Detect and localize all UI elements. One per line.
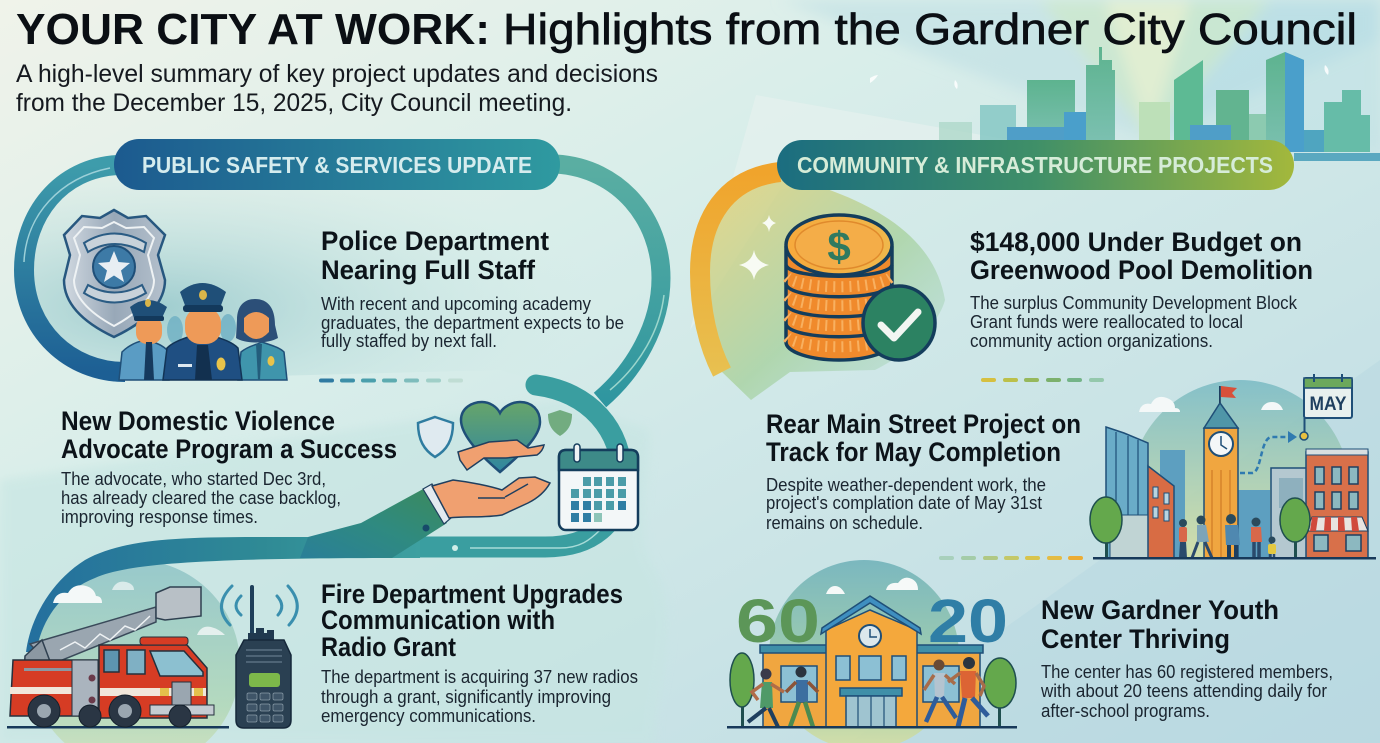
icon: coin stack bbox=[786, 215, 892, 360]
heading: fire department bbox=[321, 579, 623, 662]
tree: left bbox=[730, 653, 754, 727]
icon: calendar bbox=[559, 444, 638, 530]
wings bbox=[763, 652, 980, 727]
tree: right bbox=[984, 658, 1016, 727]
ground bbox=[727, 726, 1017, 728]
text: budget: Grant funds were reallocated to local bbox=[970, 311, 1243, 332]
text: budget: The surplus Community Development Block bbox=[970, 292, 1298, 313]
heading: domestic violence: New Domestic Violence bbox=[61, 406, 335, 436]
background circle bbox=[1130, 380, 1350, 558]
text: budget bbox=[970, 292, 1298, 351]
back buildings bbox=[1160, 450, 1185, 558]
icon: radio bbox=[221, 585, 297, 728]
panel: community and infrastructure bbox=[700, 140, 1376, 743]
text: youth center: after-school programs. bbox=[1041, 700, 1210, 721]
subtitle: A high-level summary of key project updates and decisions bbox=[16, 60, 658, 88]
clouds bbox=[53, 582, 225, 635]
shield: right bbox=[548, 410, 572, 436]
upper hand bbox=[458, 440, 544, 470]
number 20: 20 bbox=[928, 587, 1008, 655]
divider dashes: yellow green bbox=[981, 378, 1104, 382]
heading: domestic violence bbox=[61, 406, 397, 464]
text: youth center bbox=[1040, 661, 1333, 721]
clouds bbox=[1139, 397, 1283, 412]
background figures bbox=[167, 314, 236, 344]
officer: right bbox=[236, 299, 287, 380]
dashed arrow bbox=[1240, 431, 1297, 473]
heading: fire department: Communication with bbox=[321, 605, 555, 635]
truck body bbox=[10, 660, 99, 716]
text: domestic violence: The advocate, who started Dec 3rd, bbox=[61, 468, 326, 489]
section heading: community: COMMUNITY & INFRASTRUCTURE PROJECTS bbox=[797, 152, 1273, 178]
people walking bbox=[1179, 514, 1276, 558]
ribbon: lower wave bbox=[26, 385, 622, 652]
shield: left bbox=[418, 417, 453, 457]
heading: budget: $148,000 Under Budget on bbox=[970, 227, 1302, 257]
title: Highlights from the Gardner City Council bbox=[503, 5, 1357, 54]
icon: check badge bbox=[863, 286, 935, 360]
title: YOUR CITY AT WORK: bbox=[16, 5, 490, 54]
divider dashes: green orange bbox=[939, 556, 1083, 560]
clock tower bbox=[1204, 386, 1238, 558]
ground bbox=[7, 726, 229, 728]
text: domestic violence: improving response times. bbox=[61, 506, 258, 527]
heading: police: Police Department bbox=[321, 226, 549, 256]
ground bbox=[1093, 557, 1376, 560]
officer: centre bbox=[163, 283, 242, 380]
heading: budget bbox=[970, 227, 1313, 285]
heading: rear main street: Rear Main Street Project on bbox=[766, 409, 1081, 439]
icon: fire truck scene bbox=[7, 582, 229, 728]
text: police bbox=[321, 293, 624, 351]
icon: police badge bbox=[64, 210, 165, 337]
icon: hands holding heart bbox=[300, 402, 572, 558]
text: youth center: with about 20 teens attending daily for bbox=[1040, 680, 1327, 701]
text: youth center: The center has 60 registered members, bbox=[1041, 661, 1333, 682]
heading: youth center: New Gardner Youth bbox=[1041, 595, 1279, 625]
tree: left bbox=[1090, 497, 1122, 558]
central block bbox=[826, 610, 917, 727]
heading: fire department: Fire Department Upgrades bbox=[321, 579, 623, 609]
text: rear main street: remains on schedule. bbox=[766, 512, 923, 533]
text: rear main street: project's complation date of May 31st bbox=[766, 492, 1042, 513]
brick building bbox=[1306, 449, 1368, 558]
heading: police: Nearing Full Staff bbox=[321, 255, 536, 285]
heart bbox=[461, 402, 540, 472]
heading: youth center bbox=[1041, 595, 1279, 654]
icon: city street scene bbox=[1090, 374, 1376, 560]
text: police: fully staffed by next fall. bbox=[321, 330, 497, 351]
icon: sparkles bbox=[739, 215, 776, 280]
sleeve bbox=[300, 488, 447, 558]
text: rear main street bbox=[766, 474, 1046, 533]
icon: youth center scene bbox=[727, 560, 1017, 743]
ribbon: top loop bbox=[24, 164, 664, 400]
heading: youth center: Center Thriving bbox=[1041, 624, 1230, 654]
text: fire department: The department is acquiring 37 new radios bbox=[321, 666, 638, 687]
skyline bbox=[870, 47, 1380, 161]
ribbon: orange arc bbox=[700, 172, 945, 400]
tree: right bbox=[1280, 498, 1310, 558]
section heading: public safety: PUBLIC SAFETY & SERVICES UPDATE bbox=[142, 152, 532, 178]
divider dashes: blue bbox=[319, 378, 463, 382]
number 60: 60 bbox=[736, 587, 820, 655]
panel: public safety and services bbox=[7, 139, 664, 728]
text: budget: community action organizations. bbox=[970, 330, 1213, 351]
text: police: graduates, the department expects to be bbox=[321, 312, 624, 333]
text: police: With recent and upcoming academy bbox=[321, 293, 592, 314]
clouds bbox=[826, 578, 918, 594]
heading: police bbox=[321, 226, 549, 285]
running people bbox=[748, 657, 988, 727]
heading: fire department: Radio Grant bbox=[321, 632, 456, 662]
subtitle: from the December 15, 2025, City Council meeting. bbox=[16, 89, 572, 117]
orange building bbox=[1148, 466, 1174, 558]
cuff bbox=[423, 484, 451, 524]
heading: domestic violence: Advocate Program a Success bbox=[61, 434, 397, 464]
officer: left bbox=[119, 299, 169, 380]
text: fire department bbox=[321, 666, 638, 726]
radio waves bbox=[221, 586, 297, 625]
text: domestic violence bbox=[61, 468, 341, 527]
text: rear main street: Despite weather-dependent work, the bbox=[766, 474, 1046, 495]
text: fire department: emergency communications. bbox=[321, 705, 536, 726]
title bbox=[16, 5, 1357, 54]
glass building bbox=[1106, 427, 1148, 558]
heading: rear main street: Track for May Completion bbox=[766, 437, 1061, 467]
background circle: fire truck bbox=[30, 560, 240, 743]
section heading: public safety bbox=[114, 139, 560, 190]
heading: budget: Greenwood Pool Demolition bbox=[970, 255, 1313, 285]
wheels bbox=[28, 695, 191, 727]
subtitle bbox=[16, 60, 658, 117]
calendar: May: MAY bbox=[1310, 394, 1347, 415]
icon: police officers bbox=[119, 283, 287, 380]
grey building bbox=[1271, 468, 1307, 558]
icon: coin stack: $ bbox=[827, 223, 851, 270]
text: domestic violence: has already cleared the case backlog, bbox=[61, 487, 341, 508]
section heading: community bbox=[777, 140, 1294, 190]
background circle bbox=[769, 560, 959, 743]
ladder bbox=[30, 607, 156, 665]
lower hand bbox=[432, 477, 550, 518]
text: fire department: through a grant, significantly improving bbox=[321, 686, 611, 707]
heading: rear main street bbox=[766, 409, 1081, 467]
calendar: May bbox=[1300, 374, 1352, 440]
